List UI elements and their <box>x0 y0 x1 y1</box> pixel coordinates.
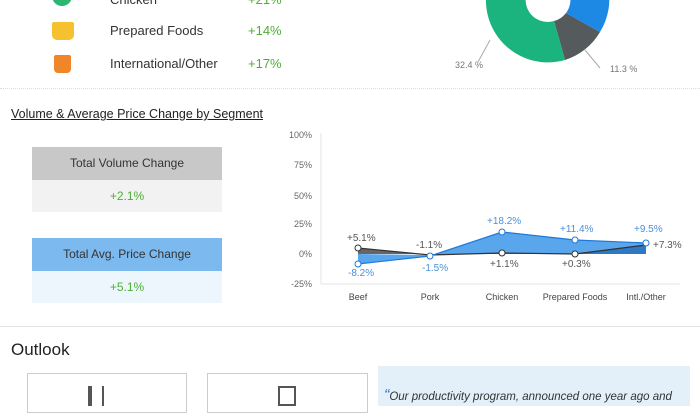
label: prepared foods: Prepared Foods <box>110 23 203 38</box>
line/area chart: -1.5% <box>422 263 448 274</box>
section heading: Volume & Average Price Change by Segment <box>11 107 263 121</box>
icon: chicken <box>52 0 72 6</box>
card: total volume change <box>32 147 222 212</box>
segment list <box>52 0 282 73</box>
line/area chart: Pork <box>421 292 440 302</box>
quote box <box>378 366 690 406</box>
line/area chart: +0.3% <box>562 259 591 270</box>
card: total avg price change: +5.1% <box>110 280 144 294</box>
card: total avg price change <box>32 238 222 303</box>
line/area chart: Beef <box>349 292 368 302</box>
value: prepared: +14% <box>248 23 282 38</box>
donut chart: 32.4 % <box>455 60 483 70</box>
card: total volume change: Total Volume Change <box>70 156 184 170</box>
line/area chart: -1.1% <box>416 240 442 251</box>
line/area chart: Intl./Other <box>626 292 666 302</box>
line/area chart: 25% <box>294 219 312 229</box>
heading: outlook: Outlook <box>11 340 70 359</box>
donut chart: 11.3 % <box>610 64 637 74</box>
line/area chart <box>289 130 682 302</box>
line/area chart: +1.1% <box>490 259 519 270</box>
line/area chart: +7.3% <box>653 240 682 251</box>
value: international: +17% <box>248 56 282 71</box>
outlook card 1 <box>27 373 187 413</box>
icon: coins <box>88 386 104 406</box>
card: total volume change: +2.1% <box>110 189 144 203</box>
label: international: International/Other <box>110 56 218 71</box>
icon: document <box>278 386 296 406</box>
quote box: “Our productivity program, announced one year ago and <box>384 387 672 404</box>
line/area chart: 0% <box>299 249 312 259</box>
card: total avg price change: Total Avg. Price Change <box>63 247 191 261</box>
icon: fries <box>54 55 71 73</box>
line/area chart: Chicken <box>486 292 518 302</box>
donut chart <box>455 0 638 74</box>
line/area chart: +11.4% <box>560 224 594 235</box>
icon: pot <box>52 22 74 40</box>
line/area chart: +9.5% <box>634 224 663 235</box>
line/area chart: -8.2% <box>348 268 374 279</box>
line/area chart: 75% <box>294 160 312 170</box>
outlook card 2 <box>207 373 368 413</box>
line/area chart: 100% <box>289 130 312 140</box>
line/area chart: 50% <box>294 191 312 201</box>
line/area chart: +5.1% <box>347 233 376 244</box>
line/area chart: Prepared Foods <box>543 292 608 302</box>
line/area chart: +18.2% <box>487 216 521 227</box>
line/area chart: -25% <box>291 279 312 289</box>
